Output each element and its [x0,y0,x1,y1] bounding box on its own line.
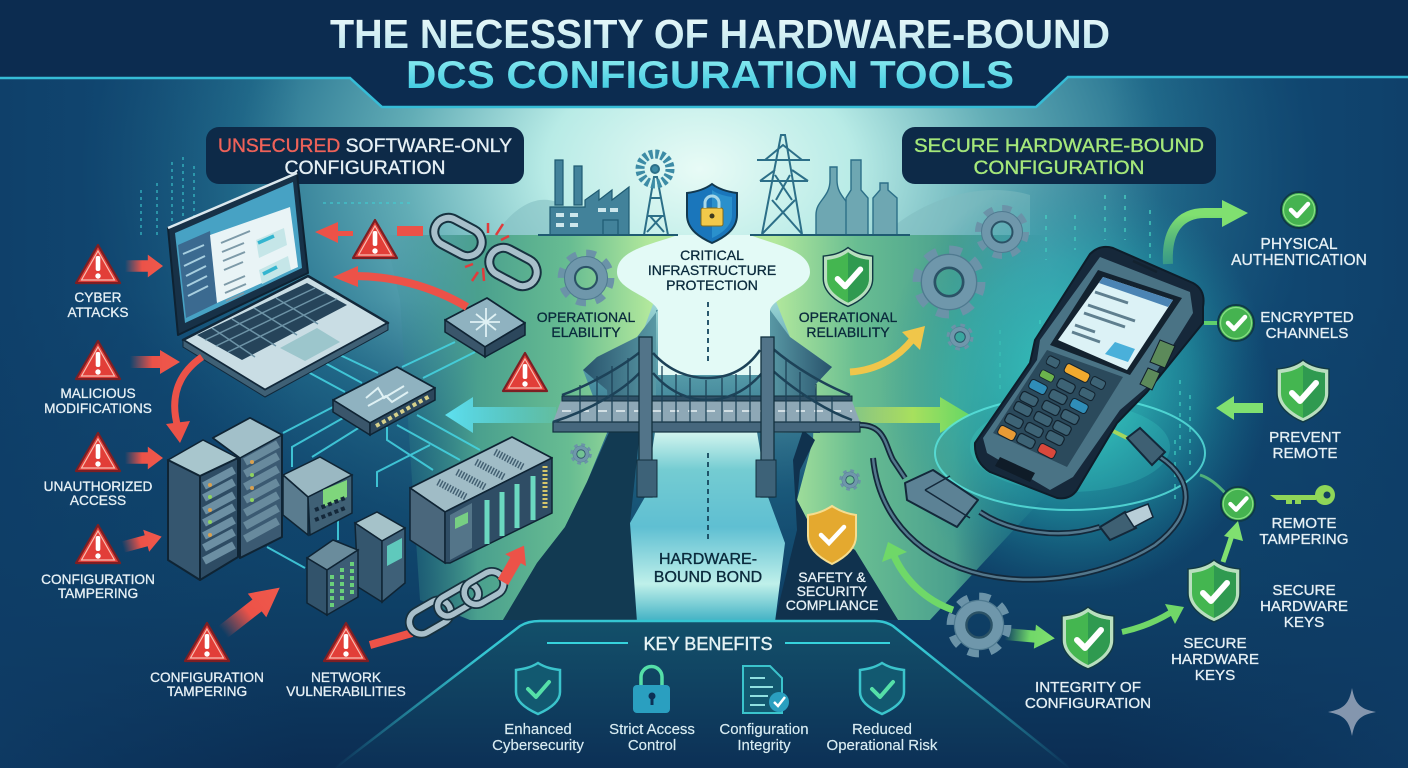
right-side benefits [1025,192,1367,712]
shield: operational reliability right: OPERATIONAL [799,309,897,325]
safety and security compliance: COMPLIANCE [786,597,878,613]
benefit: reduced operational risk: Operational Risk [827,737,938,754]
network lines [267,342,480,568]
text: operational reliability, left: ELABILITY [551,324,621,340]
benefit: strict access control: Control [628,737,676,754]
rack modules [410,437,552,563]
threat: unauthorized access: UNAUTHORIZED [44,479,152,494]
sparkle watermark [1328,688,1376,736]
data rain, left [141,155,411,235]
panel: key benefits [335,621,1070,768]
handheld configurator device [975,247,1204,498]
blue and green bridge arrows [445,397,970,433]
benefit: physical authentication: PHYSICAL [1260,236,1338,253]
heading: key benefits: KEY BENEFITS [644,634,772,654]
panel: central cliffs and fields [385,235,1060,622]
laptop [168,173,388,397]
benefit: secure hardware keys left: HARDWARE [1171,651,1259,668]
threat: cyber attacks: ATTACKS [67,305,129,320]
shield: operational reliability right: RELIABILITY [806,324,890,340]
shield: operational reliability right [799,248,897,340]
benefit: integrity of configuration: INTEGRITY OF [1035,679,1141,696]
ring around device [935,396,1205,510]
text: hardware-bound bond: HARDWARE- [659,551,757,568]
threat: configuration tampering: CONFIGURATION [41,572,155,587]
benefit: strict access control [609,666,695,754]
benefit: enhanced cybersecurity: Enhanced [504,721,572,738]
benefit: secure hardware keys left: KEYS [1195,667,1235,684]
benefit: physical authentication: AUTHENTICATION [1231,252,1367,269]
benefit: secure hardware keys left [1171,521,1259,684]
benefit: reduced operational risk: Reduced [852,721,912,738]
heading: unsecured configuration: UNSECURED SOFTWARE-ONLY [218,135,512,157]
benefit: prevent remote: PREVENT [1269,429,1341,446]
benefit: configuration integrity [719,666,809,754]
threat: configuration tampering lower [150,576,289,699]
benefit: prevent remote [1216,360,1341,462]
controller box [283,457,352,535]
threat: configuration tampering: TAMPERING [58,586,138,601]
callout: critical infrastructure protection: INFRASTRUCTURE [648,262,776,278]
benefit: remote tampering [1200,475,1349,548]
benefit: encrypted channels: CHANNELS [1266,325,1348,342]
threat: malicious modifications: MODIFICATIONS [44,401,152,416]
keypad [997,355,1106,460]
heading: secure configuration: SECURE HARDWARE-BOUND [914,135,1204,157]
benefit: integrity of configuration: CONFIGURATION [1025,695,1151,712]
callout: critical infrastructure protection [648,184,776,293]
benefit: secure hardware keys right: SECURE [1272,582,1336,599]
benefit: encrypted channels: ENCRYPTED [1260,309,1354,326]
benefit: encrypted channels [1204,305,1354,342]
centre dashed line [707,302,709,542]
broken chain [429,213,542,291]
server racks [168,418,282,580]
threat: unauthorized access [44,433,163,508]
threat: configuration tampering lower: CONFIGURATION [150,670,264,685]
warning icons near centre [353,220,547,391]
threat: malicious modifications: MALICIOUS [60,386,136,401]
benefit: enhanced cybersecurity: Cybersecurity [492,737,584,754]
benefit: remote tampering: TAMPERING [1259,531,1349,548]
yellow arrow [850,326,925,372]
data rain, right [1000,195,1190,500]
benefit: strict access control: Strict Access [609,721,695,738]
threat: cyber attacks [67,245,163,320]
callout: critical infrastructure protection: CRITICAL [680,247,744,263]
safety and security compliance: SAFETY & [798,569,866,585]
benefit: secure hardware keys right: KEYS [1284,614,1324,631]
benefit: reduced operational risk [827,663,938,754]
benefit: integrity of configuration [1025,604,1184,712]
benefit: physical authentication [1231,192,1367,269]
skyline: factory [550,160,629,235]
callout: critical infrastructure protection: PROTECTION [666,277,758,293]
safety and security compliance: SECURITY [797,583,868,599]
benefit: remote tampering: REMOTE [1272,515,1336,532]
text: hardware-bound bond: BOUND BOND [654,569,762,586]
arrow: to right [855,397,970,433]
heading: secure configuration [902,127,1216,184]
title banner [0,0,1408,107]
threat: cyber attacks: CYBER [74,290,122,305]
heading: secure configuration: CONFIGURATION [974,157,1144,179]
threat: malicious modifications [44,341,180,416]
text: operational reliability, left [537,254,635,340]
threat: network vulnerabilities [286,623,412,699]
text: hardware-bound bond [654,551,762,586]
threat: network vulnerabilities: VULNERABILITIES [286,684,406,699]
network switch [333,367,435,435]
glow behind device [880,175,1270,595]
benefit: secure hardware keys right [1260,582,1348,631]
bottom gear and arrows [882,542,1056,653]
ground lines [538,234,910,236]
router [445,298,525,357]
title line 2: DCS CONFIGURATION TOOLS [406,54,1014,97]
title line 1: THE NECESSITY OF HARDWARE-BOUND [330,11,1110,57]
benefit: prevent remote: REMOTE [1273,445,1337,462]
threat list [41,245,412,699]
bridge [553,337,860,497]
heading: unsecured configuration: CONFIGURATION [284,157,446,179]
cables and connector [860,425,1186,580]
benefit: secure hardware keys right: HARDWARE [1260,598,1348,615]
benefit: secure hardware keys left: SECURE [1183,635,1247,652]
threat: network vulnerabilities: NETWORK [311,670,381,685]
benefit: enhanced cybersecurity [492,663,584,754]
safety and security compliance [786,506,878,613]
benefit: configuration integrity: Integrity [737,737,791,754]
threat: configuration tampering lower: TAMPERING [167,684,247,699]
threat: unauthorized access: ACCESS [70,493,126,508]
skyline: pylon and tanks [757,135,897,235]
chain [405,567,508,638]
skyline: wind turbine [640,154,670,235]
benefit: configuration integrity: Configuration [719,721,809,738]
threat: configuration tampering [41,525,165,601]
small towers [307,512,405,615]
gears [572,209,1025,489]
green top arrow [1168,200,1248,264]
text: operational reliability, left: OPERATIONAL [537,309,635,325]
red attack arrows [166,222,534,588]
arrow: to left [445,397,556,433]
heading: unsecured configuration [206,127,524,184]
